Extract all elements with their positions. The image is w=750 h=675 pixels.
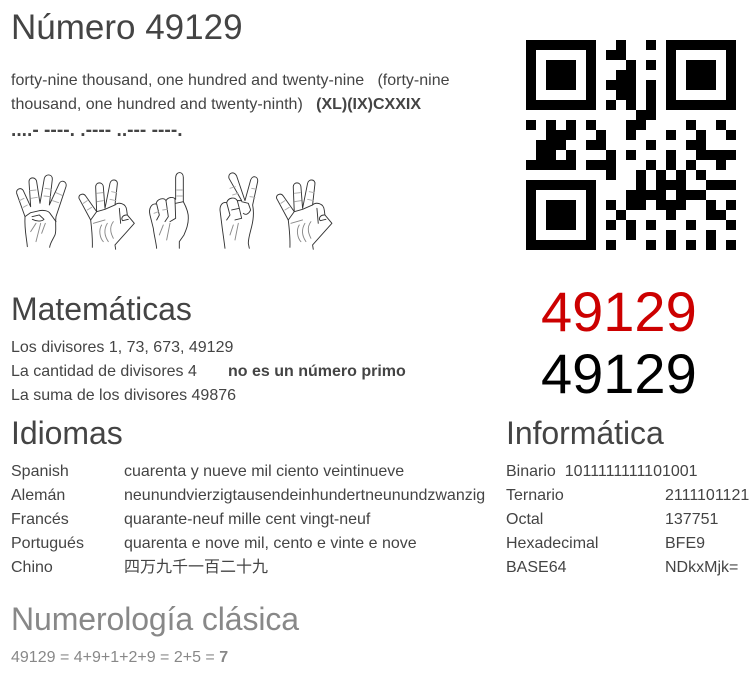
row: binary: Binario 1011111111101001 xyxy=(506,463,698,480)
row: hexadecimal xyxy=(506,535,705,552)
text: divisors: Los divisores 1, 73, 673, 49129 xyxy=(11,339,233,356)
icon: hand one xyxy=(150,173,188,248)
text: number in words: forty-nine thousand, one hundred and twenty-nine (forty-nine xyxy=(11,72,450,89)
icon: hand nine xyxy=(79,180,134,249)
row: base64: BASE64 xyxy=(506,559,566,576)
row: ternary xyxy=(506,487,749,504)
row: ternary: Ternario xyxy=(506,487,564,504)
panel: computing table xyxy=(506,463,749,576)
icon: hand two xyxy=(220,173,258,248)
icon: QR code xyxy=(526,40,736,250)
panel: number names xyxy=(11,72,450,141)
heading: Idiomas: Idiomas xyxy=(11,415,123,451)
row: French: Francés xyxy=(11,511,69,528)
panel: mathematics facts: no es un número primo xyxy=(228,363,406,380)
row: French: quarante-neuf mille cent vingt-neuf xyxy=(124,511,370,528)
row: ternary: 2111101121 xyxy=(665,487,749,504)
row: Portuguese: Portugués xyxy=(11,535,84,552)
icon: hand nine repeat xyxy=(277,180,332,249)
text: divisor sum: La suma de los divisores 49876 xyxy=(11,387,236,404)
big number: black: 49129 xyxy=(541,342,697,405)
row: base64: NDkxMjk= xyxy=(665,559,738,576)
row: Chinese: 四万九千一百二十九 xyxy=(124,559,268,576)
heading: Numerología clásica: Numerología clásica xyxy=(11,601,299,637)
row: French xyxy=(11,511,370,528)
icon: hand signs for 4 9 1 2 9 xyxy=(16,172,332,250)
heading: Informática: Informática xyxy=(506,415,664,451)
text: divisor count and primality: La cantidad de divisores 4 xyxy=(11,363,197,380)
row: Portuguese: quarenta e nove mil, cento e vinte e nove xyxy=(124,535,417,552)
text: numerology sum: 49129 = 4+9+1+2+9 = 2+5 = 7 xyxy=(11,649,228,666)
row: base64 xyxy=(506,559,738,576)
title: Número 49129 xyxy=(11,8,243,47)
big number: red: 49129 xyxy=(541,280,697,343)
row: German: Alemán xyxy=(11,487,65,504)
row: octal: 137751 xyxy=(665,511,718,528)
text: divisor count and primality xyxy=(11,363,406,380)
row: German: neunundvierzigtausendeinhundertneunundzwanzig xyxy=(124,487,485,504)
row: octal: Octal xyxy=(506,511,543,528)
row: hexadecimal: BFE9 xyxy=(665,535,705,552)
panel: mathematics facts xyxy=(11,339,406,404)
text: morse code: ....- ----. .---- ..--- ----. xyxy=(11,120,183,141)
text: ordinal and roman numeral: thousand, one hundred and twenty-ninth) (XL)(IX)CXXIX xyxy=(11,96,421,113)
panel: languages table xyxy=(11,463,485,576)
row: Chinese xyxy=(11,558,268,576)
row: Chinese: Chino xyxy=(11,559,53,576)
icon: hand four xyxy=(17,175,66,247)
row: Spanish: Spanish xyxy=(11,463,69,480)
row: octal xyxy=(506,511,718,528)
heading: Matemáticas: Matemáticas xyxy=(11,291,192,327)
row: Spanish: cuarenta y nueve mil ciento veintinueve xyxy=(124,463,404,480)
row: hexadecimal: Hexadecimal xyxy=(506,535,598,552)
